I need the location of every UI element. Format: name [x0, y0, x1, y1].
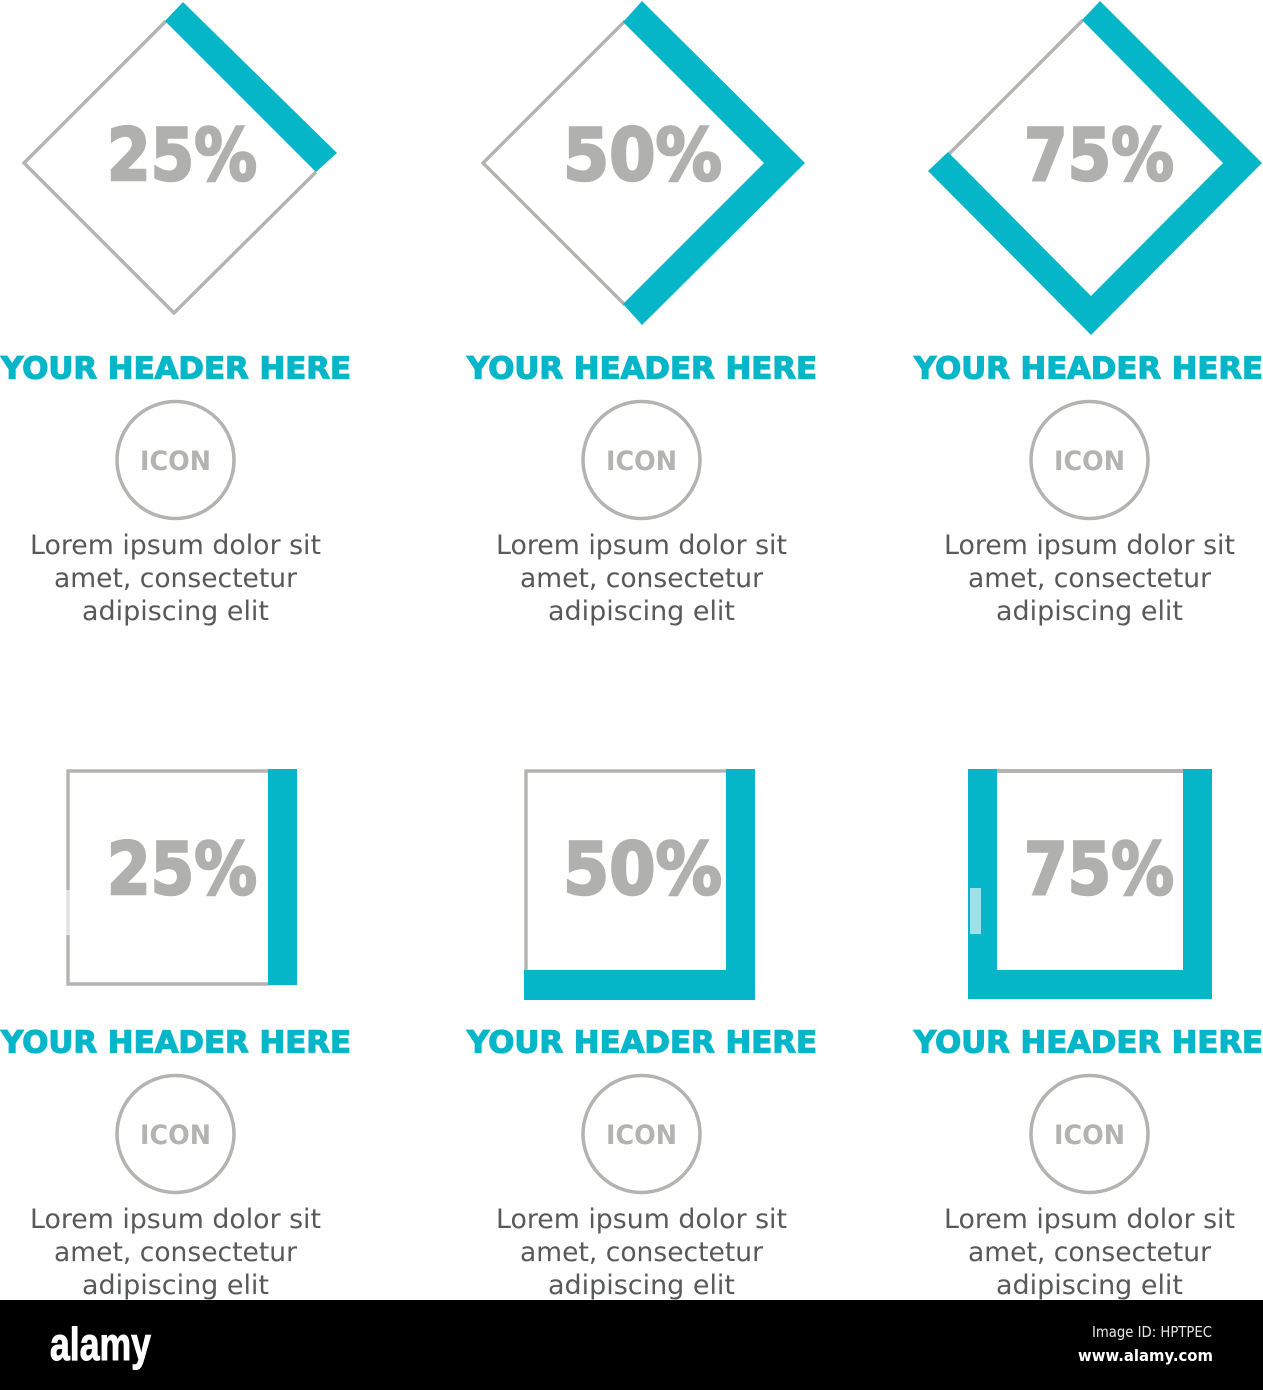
teal progress bar — [268, 769, 297, 985]
diamond outline — [948, 20, 1083, 155]
icon circle: ICON — [1054, 446, 1125, 477]
percentage: 75% — [1024, 113, 1174, 197]
body text: Lorem ipsum dolor sit — [944, 530, 1235, 561]
body text — [496, 1204, 787, 1301]
body text — [496, 530, 787, 627]
header: YOUR HEADER HERE — [0, 1026, 351, 1060]
body text — [30, 1204, 321, 1301]
icon circle: ICON — [1054, 1120, 1125, 1151]
percentage: 75% — [1024, 827, 1174, 911]
panel: square 25% — [0, 769, 351, 1301]
icon circle — [1031, 402, 1148, 518]
body text — [944, 1204, 1235, 1301]
body text: amet, consectetur — [54, 563, 298, 594]
header: YOUR HEADER HERE — [913, 352, 1263, 386]
body text: adipiscing elit — [996, 596, 1183, 627]
body text: adipiscing elit — [548, 1270, 735, 1301]
icon circle — [117, 1076, 234, 1192]
body text: amet, consectetur — [968, 1237, 1212, 1268]
body text: adipiscing elit — [996, 1270, 1183, 1301]
body text: adipiscing elit — [82, 1270, 269, 1301]
percentage: 50% — [563, 827, 722, 911]
website: www.alamy.com — [1078, 1346, 1213, 1365]
header: YOUR HEADER HERE — [0, 352, 351, 386]
body text: amet, consectetur — [520, 563, 764, 594]
image ID: Image ID: HPTPEC — [1092, 1323, 1212, 1341]
icon circle: ICON — [606, 446, 677, 477]
header: YOUR HEADER HERE — [466, 352, 817, 386]
teal progress chevron — [623, 1, 805, 325]
teal progress bars — [968, 769, 1212, 999]
teal progress bars — [524, 769, 755, 1000]
body text: adipiscing elit — [82, 596, 269, 627]
icon circle — [1031, 1076, 1148, 1192]
percentage: 50% — [563, 113, 722, 197]
body text: Lorem ipsum dolor sit — [30, 1204, 321, 1235]
diamond outline — [24, 21, 316, 313]
diamond outline — [483, 21, 625, 305]
alamy logo: alamy — [50, 1318, 151, 1370]
icon circle: ICON — [140, 446, 211, 477]
body text — [30, 530, 321, 627]
icon circle — [583, 402, 700, 518]
watermark footer bar — [0, 1300, 1263, 1390]
icon circle — [117, 402, 234, 518]
header: YOUR HEADER HERE — [913, 1026, 1263, 1060]
body text: Lorem ipsum dolor sit — [30, 530, 321, 561]
body text: amet, consectetur — [520, 1237, 764, 1268]
body text: adipiscing elit — [548, 596, 735, 627]
square outline — [997, 769, 1183, 773]
square outline — [526, 771, 727, 971]
square outline — [68, 771, 269, 984]
panel: diamond 75% — [913, 1, 1263, 627]
body text: Lorem ipsum dolor sit — [944, 1204, 1235, 1235]
panel: diamond 50% — [466, 1, 817, 627]
icon circle — [583, 1076, 700, 1192]
body text: amet, consectetur — [968, 563, 1212, 594]
body text: amet, consectetur — [54, 1237, 298, 1268]
body text: Lorem ipsum dolor sit — [496, 530, 787, 561]
percentage: 25% — [107, 827, 257, 911]
body text: Lorem ipsum dolor sit — [496, 1204, 787, 1235]
body text — [944, 530, 1235, 627]
percentage: 25% — [107, 113, 257, 197]
teal progress band — [165, 2, 337, 172]
panel: square 50% — [466, 769, 817, 1301]
icon circle: ICON — [606, 1120, 677, 1151]
header: YOUR HEADER HERE — [466, 1026, 817, 1060]
teal progress band — [928, 1, 1262, 335]
icon circle: ICON — [140, 1120, 211, 1151]
panel: square 75% — [913, 769, 1263, 1301]
panel: diamond 25% — [0, 2, 351, 627]
